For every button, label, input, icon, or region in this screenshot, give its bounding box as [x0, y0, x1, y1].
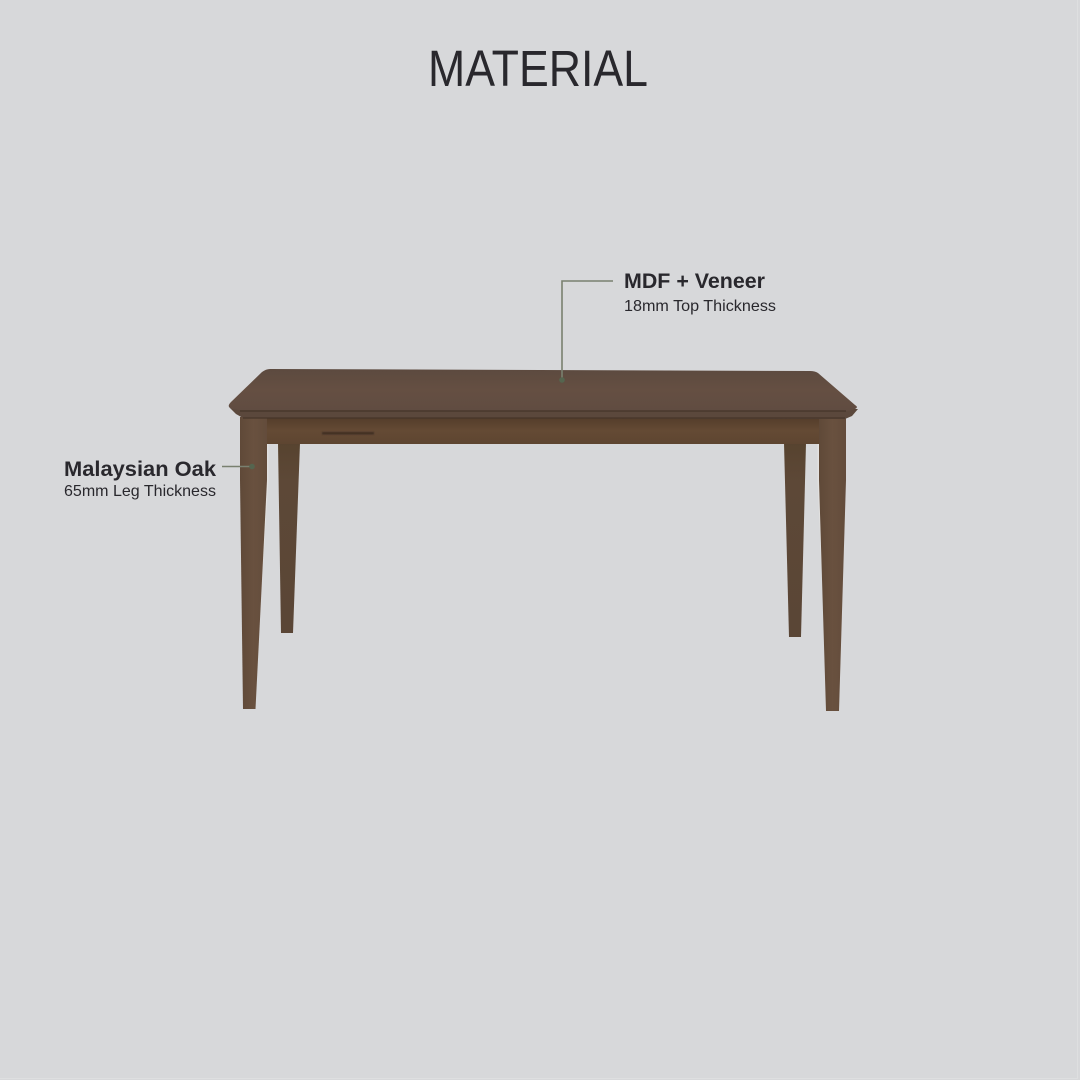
callout: MDF + Veneer [559, 270, 776, 383]
leader dot [559, 377, 565, 383]
label heading: Malaysian Oak [64, 458, 216, 481]
apron [266, 417, 820, 444]
leader line [562, 281, 613, 380]
callout: Malaysian Oak [64, 458, 255, 500]
label heading: MDF + Veneer [624, 270, 765, 293]
lower shadow line [243, 417, 845, 419]
title: MATERIAL [428, 40, 648, 97]
front right leg [818, 417, 846, 711]
table illustration [229, 369, 858, 711]
leg highlight [261, 444, 268, 580]
front left leg [240, 417, 268, 709]
leader dot [249, 464, 255, 469]
back left leg [278, 443, 300, 633]
table top surface [229, 369, 857, 411]
apron wood grain [322, 432, 374, 434]
leg highlight [818, 444, 823, 580]
table top lip [230, 408, 858, 419]
back right leg [784, 443, 806, 637]
label detail: 18mm Top Thickness [624, 298, 776, 315]
label detail: 65mm Leg Thickness [64, 483, 216, 500]
leader line [222, 466, 252, 468]
surface edge line [240, 410, 846, 412]
